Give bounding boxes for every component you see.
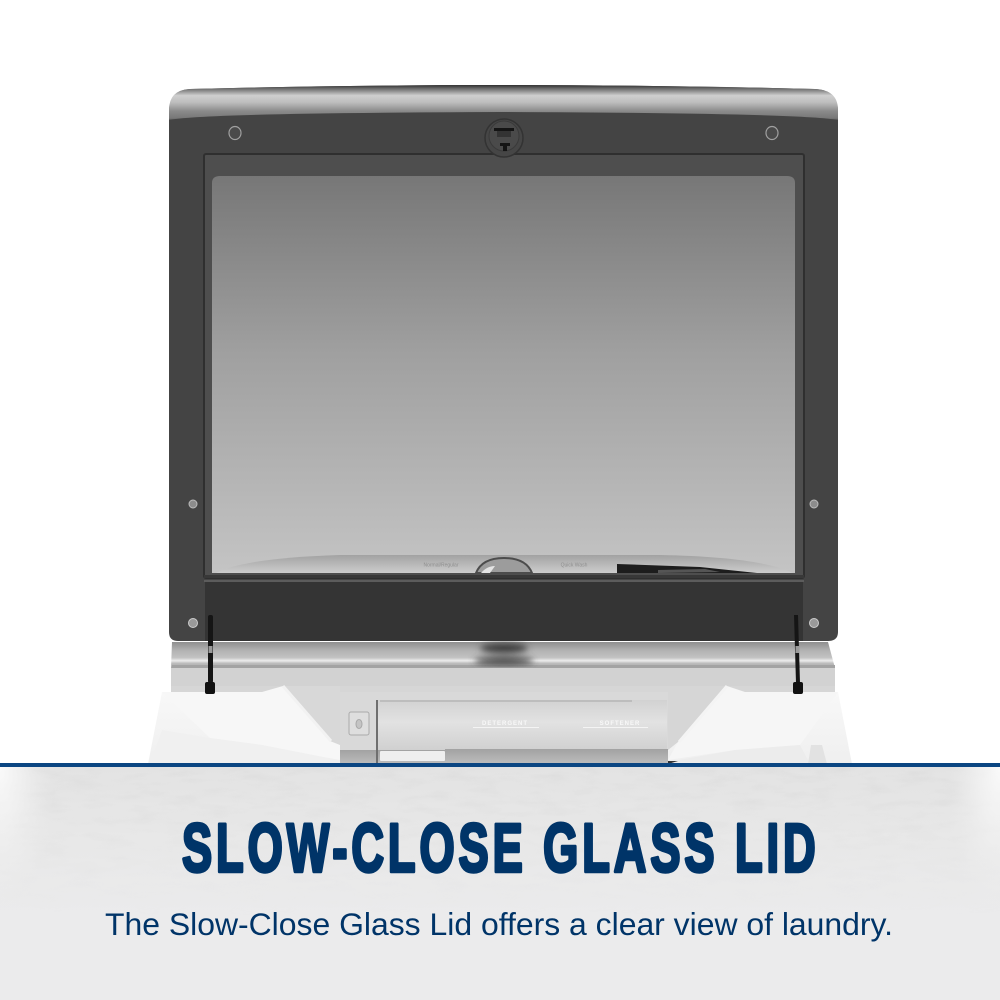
bottom caption panel	[0, 763, 1000, 1000]
right hinge arm	[793, 615, 803, 694]
label: detergent: DETERGENT	[482, 721, 528, 727]
screws	[188, 126, 818, 628]
subtitle: The Slow-Close Glass Lid offers a clear view of laundry.	[105, 906, 893, 942]
washer base body	[148, 642, 852, 764]
lid latch	[485, 119, 523, 157]
dispenser button	[349, 712, 369, 735]
lid top handle	[169, 85, 838, 120]
label: softener: SOFTENER	[600, 721, 640, 727]
glass lid frame	[169, 85, 838, 641]
dispenser drawer	[340, 700, 668, 764]
left hinge arm	[205, 615, 215, 694]
inner frame recess	[204, 154, 804, 578]
glass window	[212, 176, 795, 573]
lid rail shadow	[474, 643, 534, 665]
title: SLOW-CLOSE GLASS LID	[182, 810, 816, 887]
washer console visible through glass: Quick Wash	[561, 562, 588, 568]
washer console visible through glass	[216, 555, 793, 573]
washer console visible through glass: Normal/Regular	[423, 562, 459, 568]
